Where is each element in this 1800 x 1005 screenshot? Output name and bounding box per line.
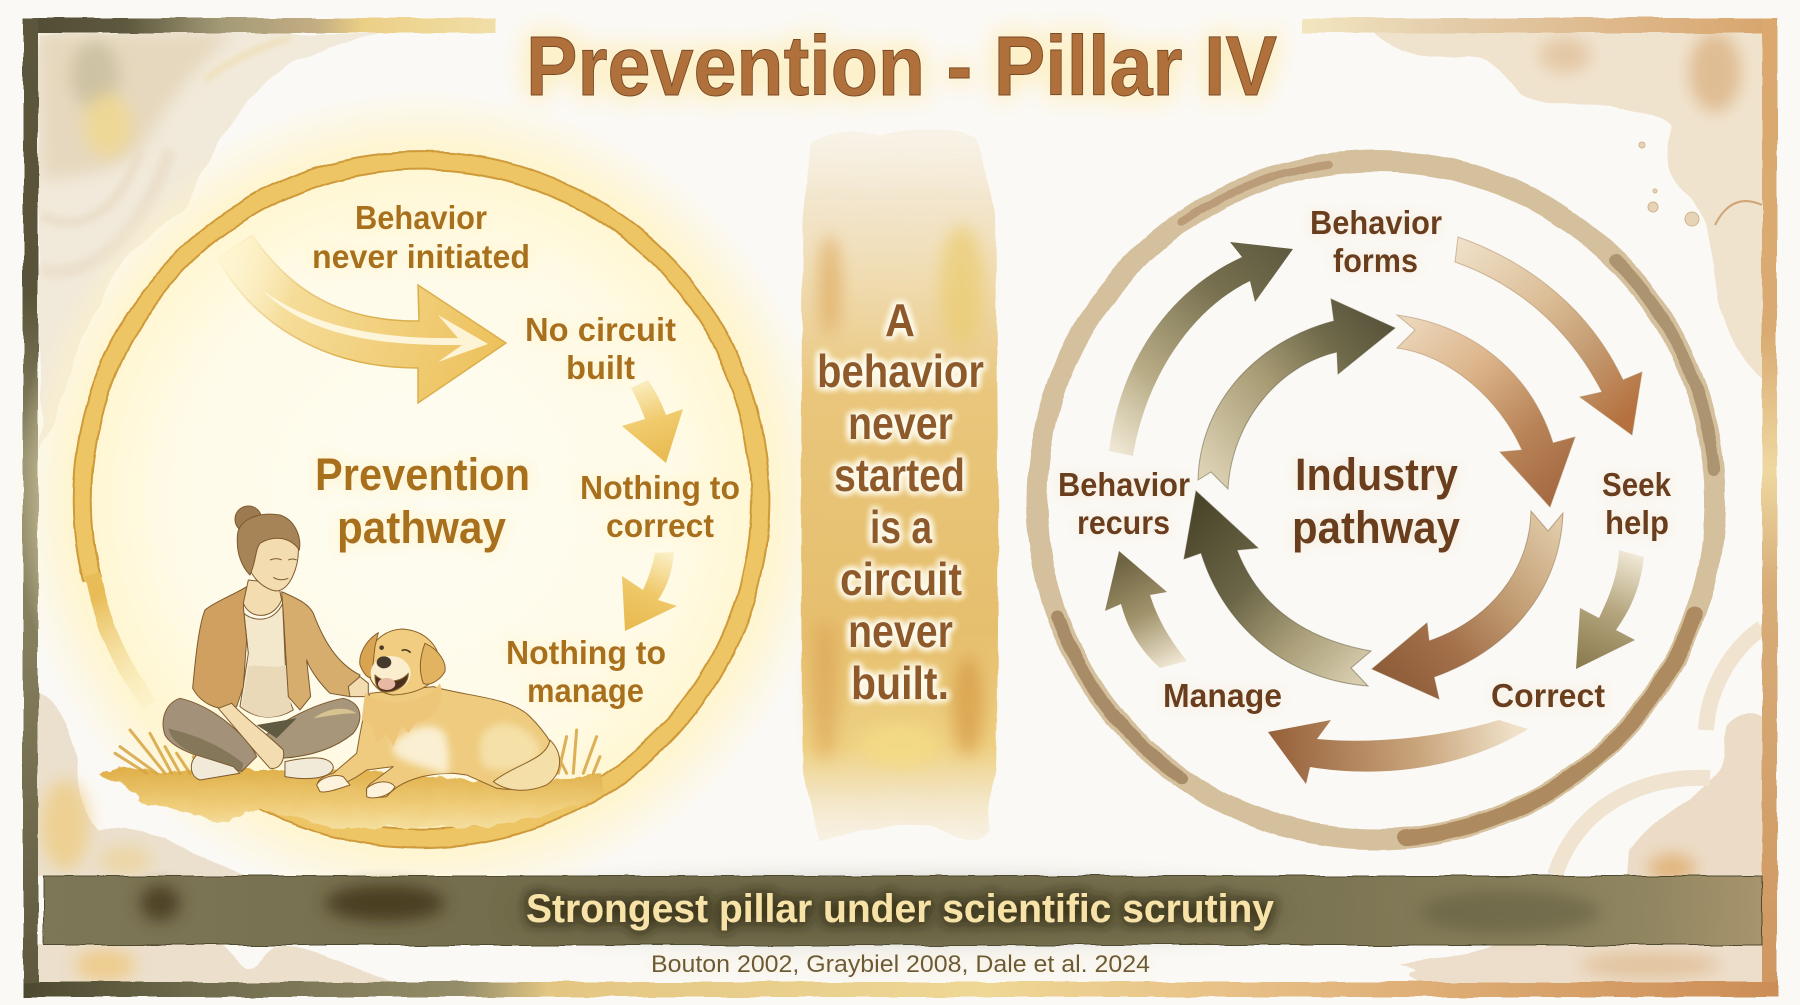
illustration: woman and dog on grass (100, 506, 602, 828)
slogan: a behavior never started is a circuit never built (817, 294, 984, 709)
heading: industry pathway: pathway (1292, 502, 1460, 553)
brown ring (1037, 161, 1715, 839)
watercolor wash: top-left corner (38, 33, 385, 450)
label: behavior recurs (1058, 466, 1190, 541)
big curved arrow (218, 235, 506, 403)
outer arrow: behavior recurs to behavior forms (1109, 242, 1293, 456)
slogan: a behavior never started is a circuit never built: built. (851, 657, 949, 709)
label: nothing to correct: Nothing to (580, 469, 740, 506)
label: nothing to manage: manage (527, 672, 644, 709)
label: behavior forms: Behavior (1310, 204, 1442, 241)
label: behavior recurs: Behavior (1058, 466, 1190, 503)
slogan: a behavior never started is a circuit never built: never (848, 397, 953, 449)
banner: strongest pillar (44, 876, 1762, 945)
slogan: a behavior never started is a circuit never built: never (848, 605, 953, 657)
inner arrow: bottom left (1184, 491, 1371, 686)
label: manage: Manage (1163, 677, 1282, 714)
label: behavior forms (1310, 204, 1442, 279)
inner arrow: top right (1397, 315, 1575, 507)
small arrow to nothing to correct (622, 380, 683, 463)
grassy ground (100, 730, 602, 828)
inner arrow: bottom right (1372, 511, 1563, 699)
watercolor wash: bottom-right corner (1400, 628, 1762, 982)
golden ring (82, 161, 760, 839)
outer arrow: manage to behavior recurs (1105, 551, 1187, 668)
heading: industry pathway: Industry (1295, 449, 1458, 500)
panel: industry pathway (1037, 161, 1715, 839)
outer arrow: behavior forms to seek help (1455, 237, 1642, 435)
citation: Bouton 2002, Graybiel 2008, Dale et al. 2024 (651, 951, 1150, 978)
slogan: a behavior never started is a circuit never built: A (885, 294, 915, 346)
watercolor wash: top-right corner (1375, 32, 1762, 378)
label: behavior never initiated (312, 199, 530, 275)
label: no circuit built (525, 311, 676, 386)
label: behavior recurs: recurs (1077, 504, 1170, 541)
label: seek help (1602, 466, 1672, 541)
heading: prevention pathway: pathway (337, 502, 506, 553)
label: nothing to correct: correct (606, 507, 714, 544)
inner arrow: top left (1198, 299, 1395, 489)
panel: central gold band (801, 130, 998, 840)
label: seek help: Seek (1602, 466, 1672, 503)
label: behavior never initiated: never initiated (312, 238, 530, 275)
label: nothing to manage: Nothing to (506, 634, 666, 671)
paint splatter dots (1639, 142, 1699, 226)
slogan: a behavior never started is a circuit never built: is a (870, 501, 932, 553)
slogan: a behavior never started is a circuit never built: behavior (817, 345, 984, 397)
slogan: a behavior never started is a circuit never built: started (834, 449, 965, 501)
title: Prevention - Pillar IV (526, 19, 1277, 113)
watercolor wash: bottom-left corner (38, 693, 392, 982)
outer arrow: correct to manage (1268, 720, 1528, 784)
label: no circuit built: No circuit (525, 311, 676, 348)
label: seek help: help (1605, 504, 1669, 541)
banner text: Strongest pillar under scientific scrutiny (526, 887, 1275, 931)
golden retriever (317, 629, 560, 798)
label: nothing to manage (506, 634, 666, 709)
heading: prevention pathway (315, 449, 530, 553)
label: no circuit built: built (566, 349, 635, 386)
label: nothing to correct (580, 469, 740, 544)
slogan: a behavior never started is a circuit never built: circuit (840, 553, 962, 605)
label: correct: Correct (1491, 677, 1605, 714)
woman (163, 506, 368, 780)
label: behavior forms: forms (1333, 242, 1418, 279)
label: behavior never initiated: Behavior (355, 199, 487, 236)
panel: prevention pathway (13, 90, 833, 910)
heading: industry pathway (1292, 449, 1460, 553)
outer arrow: seek help to correct (1576, 550, 1644, 669)
small arrow to nothing to manage (622, 552, 677, 631)
heading: prevention pathway: Prevention (315, 449, 530, 500)
